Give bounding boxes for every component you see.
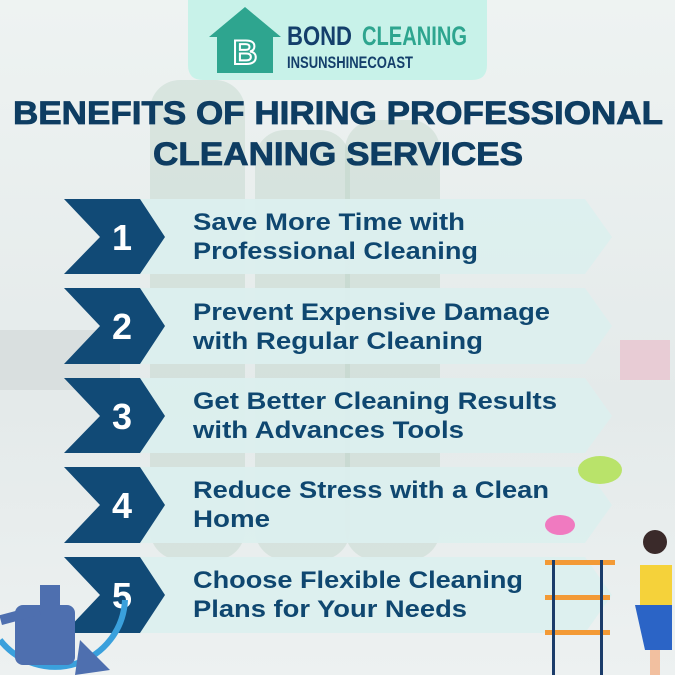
row 5: Choose Flexible Cleaning	[193, 567, 523, 594]
icon: house B	[209, 7, 281, 73]
logo text: CLEANING	[362, 21, 467, 51]
row 5	[64, 557, 612, 633]
row 5: 5	[112, 575, 132, 616]
title: BENEFITS OF HIRING PROFESSIONAL	[13, 95, 663, 131]
row 1: Save More Time with	[193, 209, 465, 236]
row 4: Home	[193, 506, 270, 533]
row 3	[64, 378, 612, 453]
row 4	[64, 467, 612, 543]
row 2: with Regular Cleaning	[192, 328, 483, 355]
row 3: 3	[112, 396, 132, 437]
row 4: Reduce Stress with a Clean	[193, 477, 549, 504]
illustration: woman with shelf	[545, 456, 672, 675]
logo text: INSUNSHINECOAST	[287, 53, 413, 72]
icon: house B: B	[233, 34, 257, 72]
logo box	[188, 0, 487, 80]
row 4: 4	[112, 485, 132, 526]
title	[13, 95, 663, 172]
row 3: with Advances Tools	[192, 417, 464, 444]
row 2	[64, 288, 612, 364]
row 3: Get Better Cleaning Results	[193, 388, 557, 415]
logo text: BOND	[287, 21, 352, 51]
row 5: Plans for Your Needs	[193, 596, 467, 623]
row 2: 2	[112, 306, 132, 347]
row 2: Prevent Expensive Damage	[193, 299, 550, 326]
row 1: Professional Cleaning	[193, 238, 478, 265]
row 1: 1	[112, 217, 132, 258]
logo text	[287, 21, 467, 72]
row 1	[64, 199, 612, 274]
icon: cleaning bucket logo	[0, 585, 125, 675]
title: CLEANING SERVICES	[153, 136, 523, 172]
